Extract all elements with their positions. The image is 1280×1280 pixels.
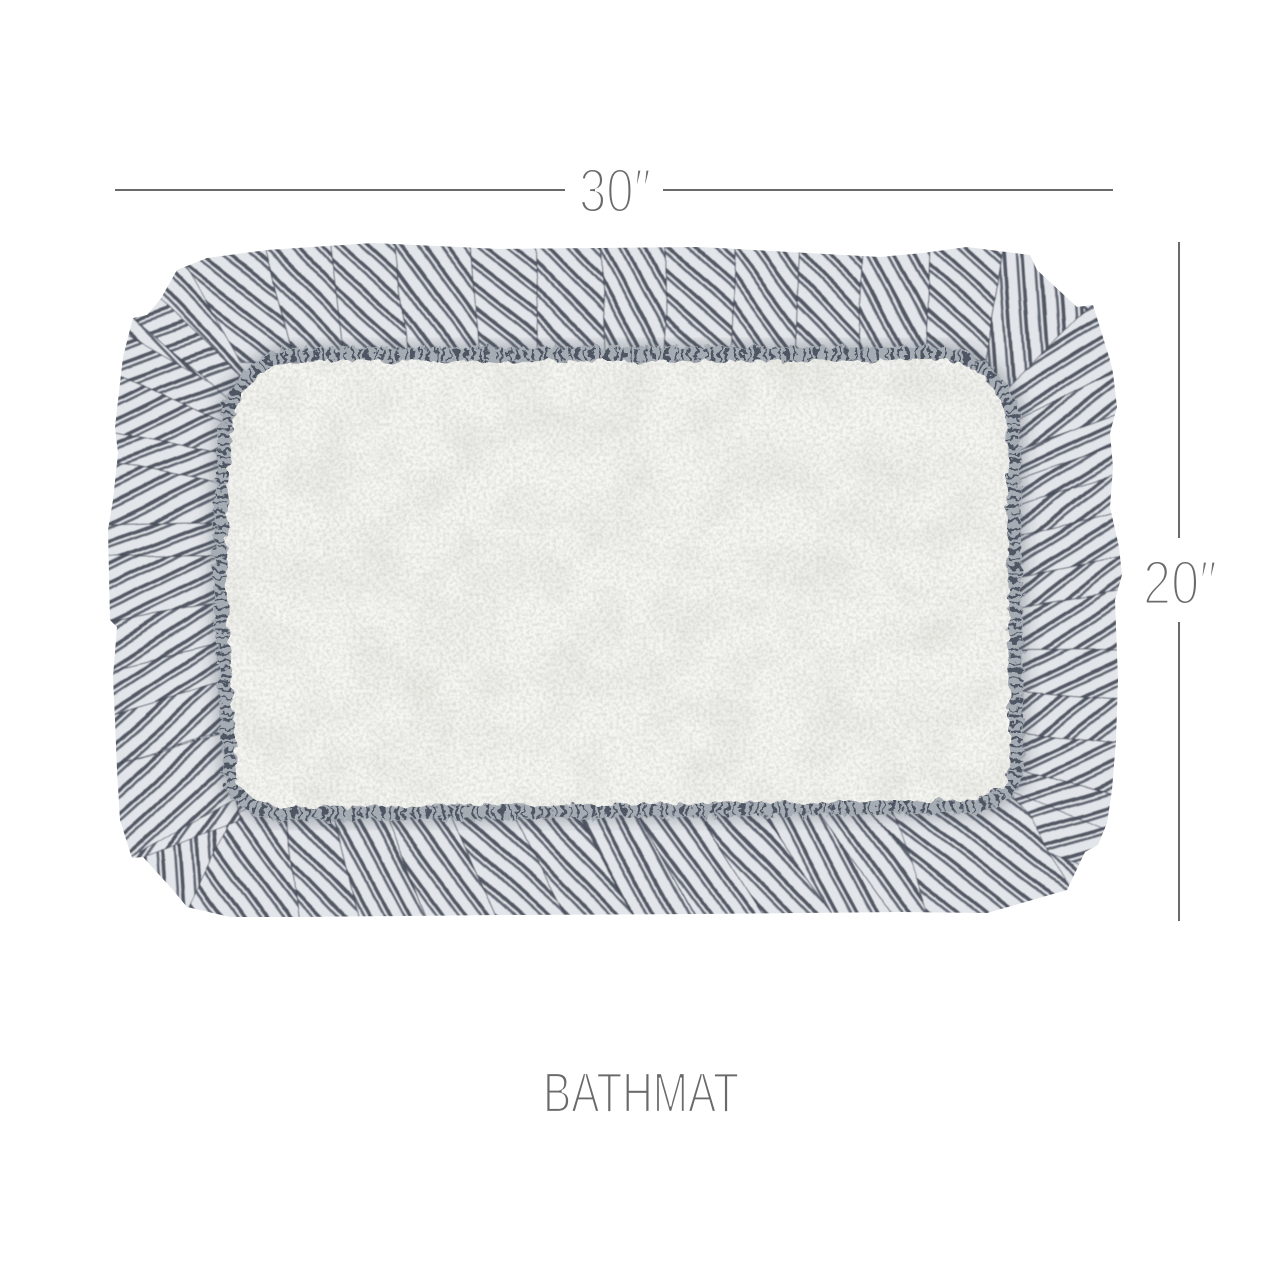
panel: bathmat product xyxy=(90,230,1140,930)
infographic: bathmat dimension diagram xyxy=(108,170,1214,1112)
gathered seam shadow xyxy=(227,360,1010,808)
product label: BATHMAT: BATHMAT xyxy=(543,1061,739,1125)
height dimension: 20 inches: 20″ xyxy=(1143,549,1217,618)
top ruffle pleats xyxy=(170,238,1085,395)
width dimension: 30 inches: 30″ xyxy=(579,157,651,226)
right ruffle pleats xyxy=(1005,300,1130,880)
striped ruffle border xyxy=(90,230,1140,930)
left ruffle pleats xyxy=(95,300,245,860)
bottom ruffle pleats xyxy=(144,800,927,917)
white shag centre xyxy=(227,360,1010,808)
frayed seam xyxy=(221,354,1016,814)
bottom-right corner fold xyxy=(890,795,1070,925)
